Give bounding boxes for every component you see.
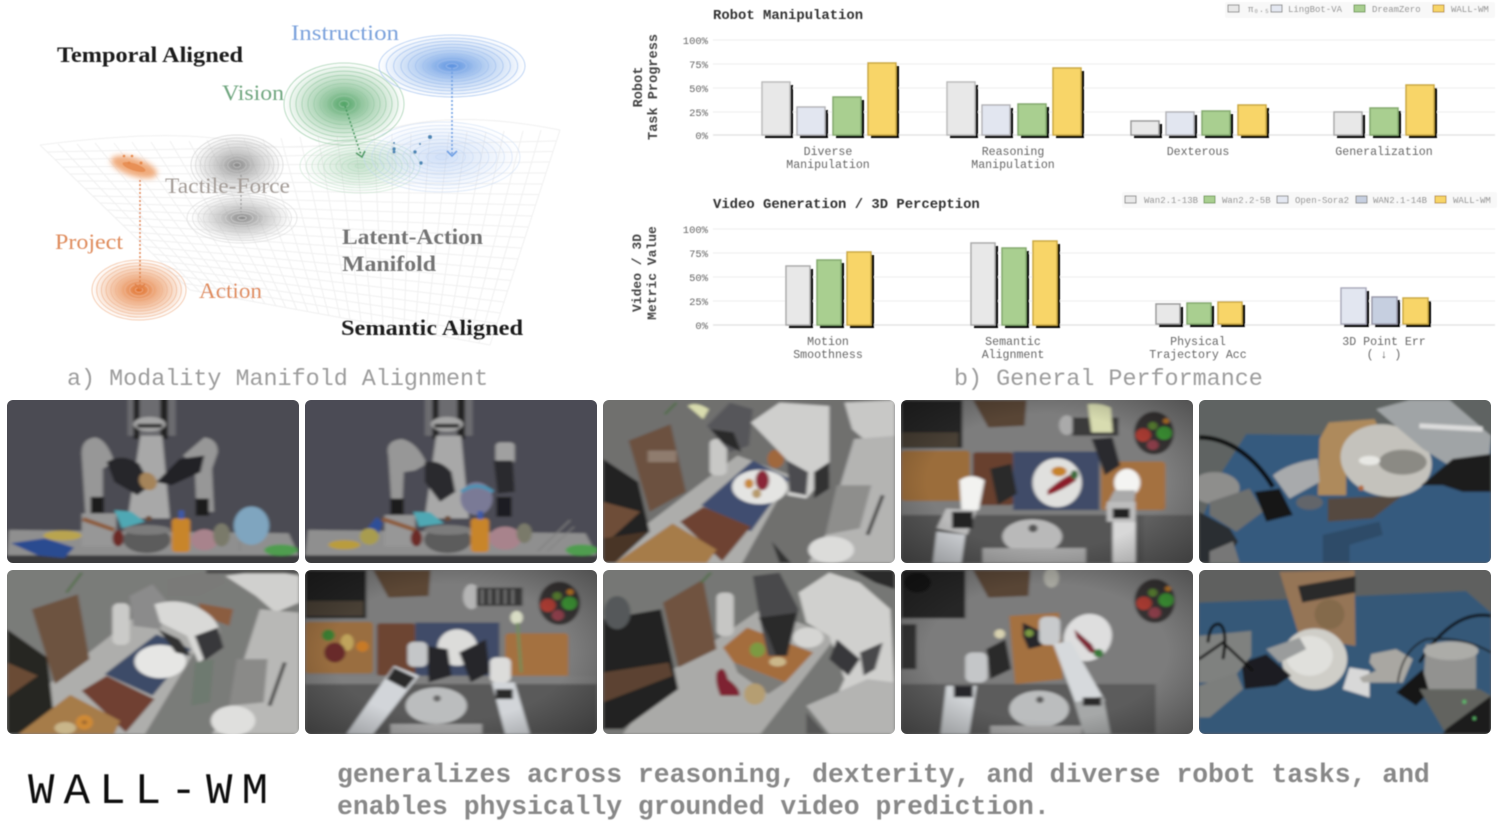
label: Project: Project xyxy=(55,229,123,254)
vision distribution xyxy=(284,63,404,145)
label: Semantic Aligned: Semantic Aligned xyxy=(341,315,524,340)
chart: video generation and 3D perception xyxy=(630,192,1497,362)
category labels: Trajectory Acc xyxy=(1149,349,1247,362)
bars: dexterous xyxy=(1131,105,1269,138)
photo: top-down plate, two grippers xyxy=(298,566,605,739)
category labels: ( ↓ ) xyxy=(1367,349,1401,362)
bars: semantic alignment xyxy=(971,241,1060,328)
instruction distribution xyxy=(379,35,525,97)
tactile-force distribution upper xyxy=(191,135,283,195)
arrow: tactile-force projection xyxy=(240,175,242,212)
legend: WAN2.1-14B xyxy=(1373,196,1428,206)
legend: Open-Sora2 xyxy=(1295,196,1349,206)
projected action splash xyxy=(108,151,160,183)
y axis ticks and gridlines: 100% xyxy=(683,225,709,237)
legend: LingBot-VA xyxy=(1288,5,1343,15)
panel: general performance charts xyxy=(630,2,1497,393)
caption b: b) General Performance xyxy=(954,367,1263,393)
title: WALL-WM: WALL-WM xyxy=(28,767,268,817)
legend xyxy=(1225,2,1495,18)
bars: physical trajectory accuracy xyxy=(1156,302,1245,327)
y axis ticks and gridlines xyxy=(683,225,1495,333)
tactile-force distribution lower xyxy=(187,193,297,243)
category labels: Reasoning xyxy=(982,146,1044,159)
bars: generalization xyxy=(1334,85,1437,138)
category labels: Manipulation xyxy=(971,159,1055,172)
chart: robot manipulation xyxy=(632,2,1495,172)
category labels xyxy=(793,336,1426,362)
legend: Wan2.1-13B xyxy=(1144,196,1199,206)
category labels: Physical xyxy=(1170,336,1226,349)
category labels: Generalization xyxy=(1335,146,1433,159)
label: Instruction: Instruction xyxy=(291,20,399,45)
y axis ticks and gridlines: 75% xyxy=(689,249,709,261)
category labels xyxy=(786,146,1433,172)
y axis ticks and gridlines: 25% xyxy=(689,108,709,120)
category labels: Motion xyxy=(807,336,849,349)
category labels: Dexterous xyxy=(1167,146,1229,159)
y axis ticks and gridlines: 75% xyxy=(689,60,709,72)
photo: front view robot with blue cloth xyxy=(0,396,306,568)
photo: side view placemat and plate, gripper over plate xyxy=(0,566,306,739)
y axis ticks and gridlines: 25% xyxy=(689,297,709,309)
legend: Wan2.2-5B xyxy=(1222,196,1271,206)
category labels: Alignment xyxy=(982,349,1044,362)
label: Latent-Action Manifold: Latent-Action xyxy=(342,224,483,249)
panel: modality manifold alignment diagram xyxy=(40,20,560,393)
category labels: Diverse xyxy=(804,146,852,159)
y axis ticks and gridlines: 0% xyxy=(695,131,709,143)
label: Vision: Vision xyxy=(222,80,284,105)
panel: robot photo grid xyxy=(0,396,1496,739)
photo: front view robot holding blue lid xyxy=(298,396,605,568)
category labels: Manipulation xyxy=(786,159,870,172)
bars: motion smoothness xyxy=(786,252,874,328)
y axis ticks and gridlines: 50% xyxy=(689,84,709,96)
photo: dual arm with round lid and box on blue mat xyxy=(1190,566,1496,739)
y axis title: Video / 3D xyxy=(630,234,645,312)
description text: generalizes across reasoning, dexterity, and diverse robot tasks, and xyxy=(337,760,1430,790)
category labels: Semantic xyxy=(985,336,1041,349)
y axis ticks and gridlines: 100% xyxy=(683,36,709,48)
label: Temporal Aligned: Temporal Aligned xyxy=(57,42,244,67)
arrow: vision projection xyxy=(345,106,365,157)
legend xyxy=(1122,192,1497,208)
legend: WALL-WM xyxy=(1453,196,1491,206)
scattered points xyxy=(392,135,432,165)
bars: diverse manipulation xyxy=(762,63,899,138)
label: Tactile-Force: Tactile-Force xyxy=(165,173,290,198)
photo: side view plate with food xyxy=(600,396,906,568)
label: Latent-Action Manifold: Manifold xyxy=(342,251,436,276)
legend: π₀.₅ xyxy=(1248,5,1270,15)
photo: top-down plate with flower gripper xyxy=(898,396,1197,568)
bars: reasoning manipulation xyxy=(947,68,1084,138)
y axis ticks and gridlines: 0% xyxy=(695,321,709,333)
y axis title: Task Progress xyxy=(647,34,662,140)
action distribution xyxy=(92,260,186,320)
y axis ticks and gridlines: 50% xyxy=(689,273,709,285)
projected vision distribution on manifold xyxy=(300,139,420,193)
chart title: Robot Manipulation xyxy=(713,8,863,24)
arrow: project action xyxy=(135,180,145,289)
legend: WALL-WM xyxy=(1451,5,1489,15)
category labels: Smoothness xyxy=(793,349,863,362)
bars: 3D point error xyxy=(1341,288,1431,327)
latent-action manifold grid surface xyxy=(40,119,560,345)
description text: enables physically grounded video prediction. xyxy=(337,792,1050,822)
label: Action: Action xyxy=(199,278,262,303)
category labels: 3D Point Err xyxy=(1342,336,1426,349)
y axis title: Metric Value xyxy=(645,226,660,320)
y axis ticks and gridlines xyxy=(683,36,1495,143)
caption a: a) Modality Manifold Alignment xyxy=(67,367,488,393)
legend: DreamZero xyxy=(1372,5,1421,15)
y axis title: Robot xyxy=(632,67,647,107)
photo: top-down cutting board with arm xyxy=(898,566,1197,739)
photo: side view board with apple xyxy=(600,566,906,739)
projected instruction distribution on manifold xyxy=(364,122,520,192)
photo: dual arm with white dish and box xyxy=(1190,396,1496,568)
chart title: Video Generation / 3D Perception xyxy=(713,197,980,213)
arrow: instruction projection xyxy=(447,68,457,156)
